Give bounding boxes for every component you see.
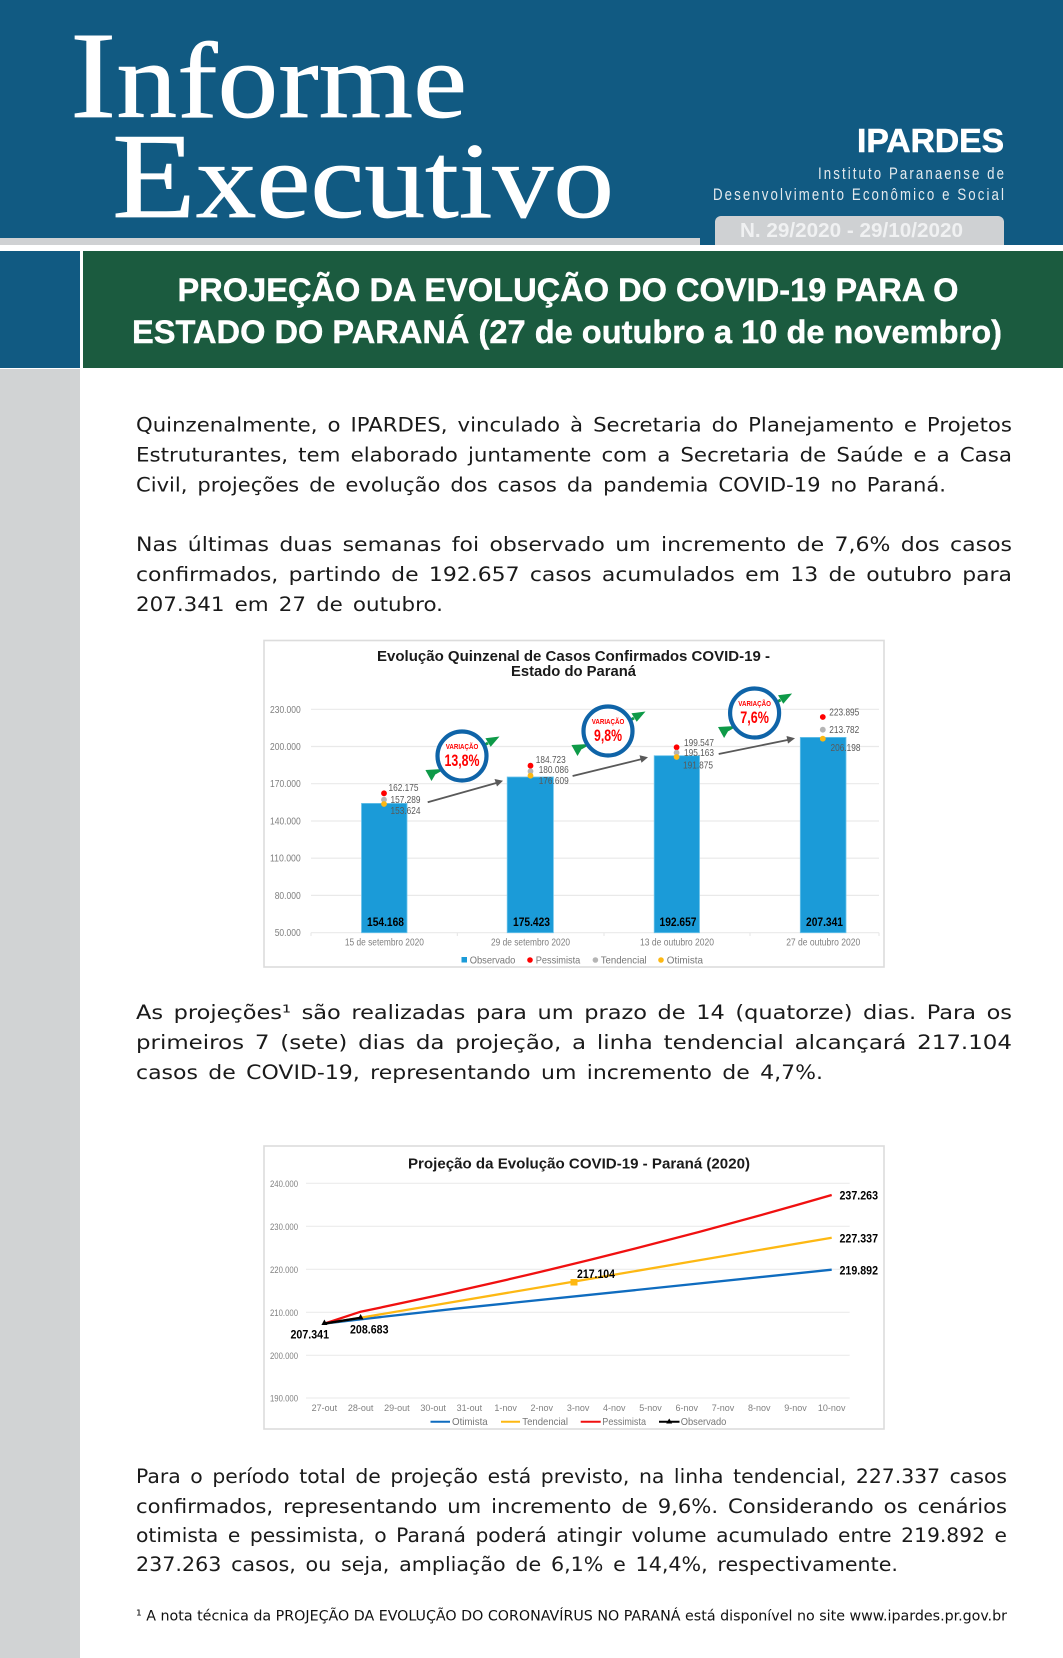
chart 1 x axis labels: 29 de setembro 2020 [491, 938, 570, 949]
chart 1 scenario value labels: 206.198 [830, 742, 861, 754]
chart 1 y axis labels: 200.000 [270, 742, 301, 753]
chart 1 y axis labels: 170.000 [270, 779, 301, 790]
chart 2: projeção da evolução [264, 1146, 884, 1429]
chart 1 legend [462, 954, 703, 966]
chart 1 y axis labels: 80.000 [275, 891, 301, 902]
badge: variação 9,8%: VARIAÇÃO [592, 717, 625, 726]
line: pessimista [324, 1195, 832, 1324]
badge: variação 7,6% [718, 688, 792, 738]
badge: variação 13,8%: VARIAÇÃO [446, 742, 479, 751]
paragraph 3: casos de COVID-19, representando um incremento de 4,7%. [136, 1061, 823, 1084]
chart 2 x axis labels: 31-out [457, 1403, 483, 1413]
chart 2 legend: Pessimista [602, 1416, 646, 1428]
arrow: 15 set to 29 set [428, 779, 503, 802]
chart 2 legend: Tendencial [522, 1416, 568, 1428]
left blue block [0, 251, 80, 368]
chart 1 title: Evolução Quinzenal de Casos Confirmados COVID-19 - [377, 649, 770, 665]
chart 1 legend: Pessimista [536, 954, 580, 966]
chart 2 y axis labels: 230.000 [270, 1222, 298, 1233]
line: tendencial [324, 1238, 832, 1324]
arrow: 13 out to 27 out [719, 736, 795, 754]
paragraph 2: Nas últimas duas semanas foi observado um incremento de 7,6% dos casos [136, 533, 1012, 556]
chart 1 legend: Tendencial [601, 954, 647, 966]
line: otimista [324, 1270, 832, 1324]
chart 1 bar values: 207.341 [806, 915, 843, 929]
chart 2 value labels: 237.263 [840, 1188, 878, 1202]
chart 1 scenario value labels: 195.163 [684, 747, 714, 759]
paragraph 4: confirmados, representando um incremento de 9,6%. Considerando os cenários [136, 1495, 1007, 1518]
chart 1 y axis labels: 50.000 [275, 928, 301, 939]
chart 1 y axis labels [270, 705, 301, 939]
badge: variação 13,8% [425, 732, 500, 781]
chart 2 value labels: 208.683 [350, 1323, 389, 1337]
chart 2 value labels: 227.337 [840, 1232, 878, 1246]
chart 2 x axis labels: 9-nov [784, 1403, 807, 1413]
chart 2 y axis labels [270, 1179, 298, 1404]
chart 2 x axis labels: 5-nov [639, 1403, 662, 1413]
chart 1 title: Estado do Paraná [511, 664, 637, 680]
chart 2 x axis labels: 1-nov [494, 1403, 517, 1413]
chart 1 x axis labels: 27 de outubro 2020 [786, 938, 861, 949]
chart 2 x axis labels: 29-out [384, 1403, 410, 1413]
chart 1 scenario value labels: 162.175 [388, 782, 419, 794]
line: observado [321, 1314, 364, 1325]
chart 2 legend: Observado [681, 1416, 727, 1428]
chart 1 scenario value labels: 153.624 [390, 805, 421, 817]
paragraph 2: confirmados, partindo de 192.657 casos acumulados em 13 de outubro para [136, 563, 1012, 586]
badge: variação 13,8%: 13,8% [444, 751, 480, 770]
chart 1 bar values: 192.657 [660, 915, 697, 929]
arrow: 29 set to 13 out [573, 755, 648, 776]
chart 2 y axis labels: 200.000 [270, 1351, 298, 1362]
paragraph 2 [136, 533, 1012, 616]
paragraph 1: Quinzenalmente, o IPARDES, vinculado à Secretaria do Planejamento e Projetos [136, 414, 1012, 436]
chart 1 bar values: 175.423 [513, 915, 550, 929]
title: Executivo: Executivo [112, 109, 614, 244]
chart 1: evolução quinzenal [264, 640, 884, 967]
paragraph 1: Estruturantes, tem elaborado juntamente com a Secretaria de Saúde e a Casa [136, 444, 1012, 466]
chart 1 y axis labels: 230.000 [270, 705, 301, 716]
chart 1 scenario value labels: 191.875 [683, 760, 713, 772]
title bar [83, 251, 1063, 368]
badge: variação 7,6%: 7,6% [740, 708, 769, 727]
chart 2 x axis labels: 6-nov [676, 1403, 699, 1413]
chart 2 x axis labels [312, 1403, 846, 1413]
left gray column [0, 369, 80, 1658]
chart 1 scenario value labels: 223.895 [829, 706, 859, 718]
chart 1 scenario value labels [388, 706, 861, 817]
chart 2 y axis labels: 210.000 [270, 1308, 298, 1319]
chart 2 legend [430, 1416, 727, 1428]
chart 1 y axis labels: 140.000 [270, 816, 301, 828]
chart 2 x axis labels: 2-nov [531, 1403, 554, 1413]
edition tab: N. 29/2020 - 29/10/2020 [740, 220, 963, 242]
footnote: ¹ A nota técnica da PROJEÇÃO DA EVOLUÇÃO DO CORONAVÍRUS NO PARANÁ está disponível no site www.ipardes.pr.gov.br [136, 1608, 1008, 1624]
edition tab [715, 216, 1004, 245]
chart 2 x axis labels: 30-out [420, 1403, 446, 1413]
chart 2 value labels: 217.104 [577, 1267, 615, 1281]
chart 2 value labels [290, 1188, 878, 1341]
chart 2 y axis labels: 220.000 [270, 1265, 298, 1276]
title bar: PROJEÇÃO DA EVOLUÇÃO DO COVID-19 PARA O [178, 272, 958, 308]
chart 2 x axis labels: 27-out [312, 1403, 338, 1413]
title bar: ESTADO DO PARANÁ (27 de outubro a 10 de novembro) [132, 314, 1002, 350]
paragraph 2: 207.341 em 27 de outubro. [136, 593, 443, 616]
chart 1 bars [362, 737, 846, 933]
paragraph 3 [136, 1001, 1012, 1084]
chart 2 x axis labels: 3-nov [567, 1403, 590, 1413]
badge: variação 9,8% [571, 706, 646, 756]
chart 1 bar values [367, 915, 843, 929]
chart 1 x axis labels [345, 938, 861, 949]
chart 2 x axis labels: 4-nov [603, 1403, 626, 1413]
chart 1 legend: Otimista [667, 954, 703, 966]
chart 1 scenario value labels: 180.086 [539, 764, 569, 776]
chart 1 scenario value labels: 213.782 [829, 724, 859, 736]
institute name line 2: Desenvolvimento Econômico e Social [713, 186, 1004, 204]
chart 1 title [377, 649, 770, 680]
logo: IPARDES: IPARDES [857, 122, 1004, 159]
chart 2 x axis labels: 28-out [348, 1403, 374, 1413]
chart 1 scenario value labels: 157.289 [390, 794, 421, 806]
chart 2 title: Projeção da Evolução COVID-19 - Paraná (2020) [408, 1155, 750, 1172]
chart 2 legend: Otimista [452, 1416, 488, 1428]
chart 2 value labels: 219.892 [840, 1263, 878, 1277]
paragraph 3: primeiros 7 (sete) dias da projeção, a linha tendencial alcançará 217.104 [136, 1031, 1012, 1054]
chart 2 x axis labels: 10-nov [818, 1403, 846, 1413]
marker: tendencial 3-nov [570, 1279, 578, 1286]
chart 2 x axis labels: 8-nov [748, 1403, 771, 1413]
badge: variação 7,6%: VARIAÇÃO [738, 699, 771, 708]
chart 1 legend: Observado [470, 954, 516, 966]
paragraph 4: Para o período total de projeção está previsto, na linha tendencial, 227.337 casos [136, 1465, 1007, 1488]
paragraph 4: otimista e pessimista, o Paraná poderá atingir volume acumulado entre 219.892 e [136, 1524, 1007, 1547]
chart 2 y axis labels: 190.000 [270, 1394, 298, 1404]
chart 1 scenario value labels: 199.547 [684, 737, 714, 749]
chart 1 scenario dots [381, 714, 826, 807]
chart 2 y axis labels: 240.000 [270, 1179, 298, 1190]
paragraph 1 [136, 414, 1012, 496]
title: Informe: Informe [70, 7, 467, 144]
chart 1 scenario value labels: 184.723 [536, 754, 566, 766]
paragraph 1: Civil, projeções de evolução dos casos da pandemia COVID-19 no Paraná. [136, 474, 946, 496]
chart 1 bar values: 154.168 [367, 915, 404, 929]
chart 1 x axis labels: 15 de setembro 2020 [345, 938, 424, 949]
chart 1 scenario value labels: 176.609 [539, 775, 569, 787]
header banner [0, 0, 1063, 245]
chart 2 value labels: 207.341 [290, 1327, 329, 1341]
institute name line 1: Instituto Paranaense de [818, 165, 1004, 183]
badge: variação 9,8%: 9,8% [594, 726, 622, 745]
paragraph 4 [136, 1465, 1007, 1576]
chart 2 x axis labels: 7-nov [712, 1403, 735, 1413]
paragraph 4: 237.263 casos, ou seja, ampliação de 6,1% e 14,4%, respectivamente. [136, 1553, 898, 1576]
paragraph 3: As projeções¹ são realizadas para um prazo de 14 (quatorze) dias. Para os [136, 1001, 1012, 1024]
chart 1 y axis labels: 110.000 [270, 854, 301, 865]
chart 1 x axis labels: 13 de outubro 2020 [640, 938, 714, 949]
